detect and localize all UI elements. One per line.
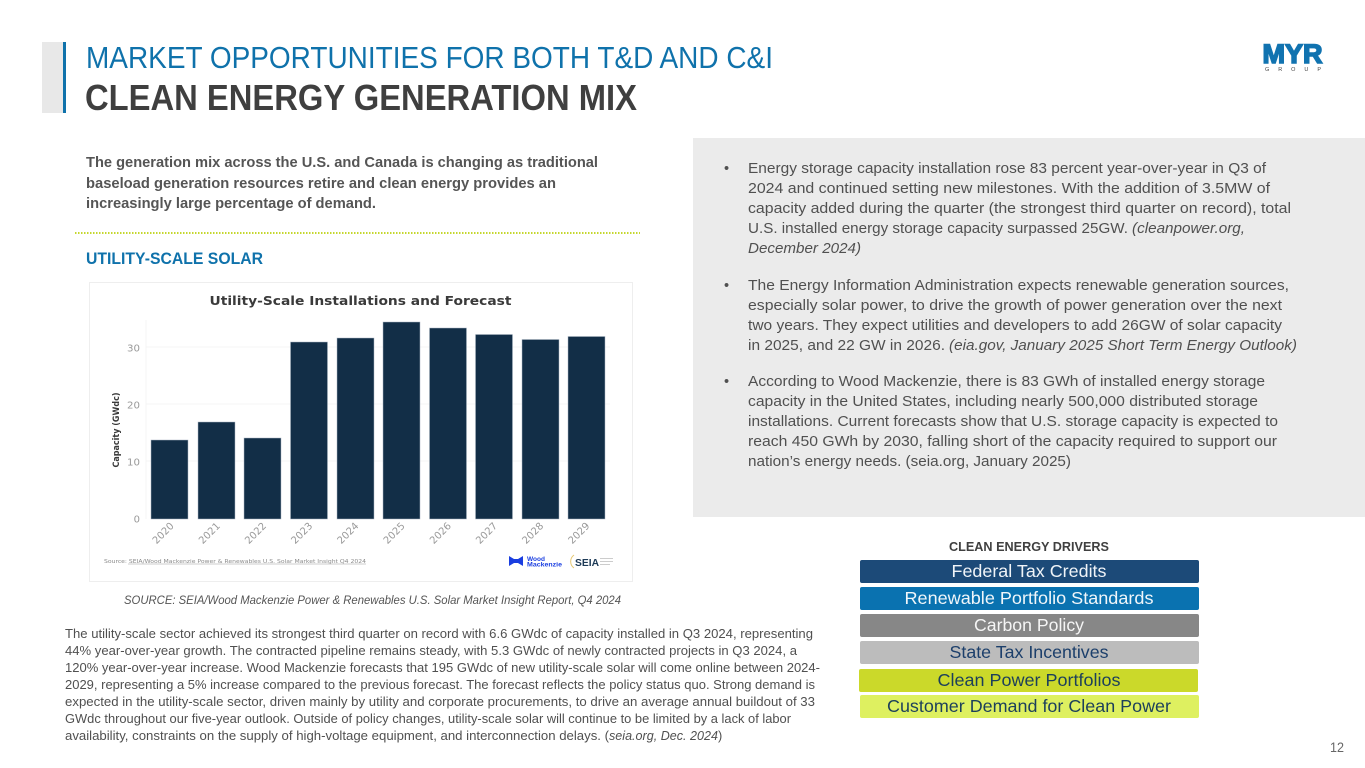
text block: utility-scale paragraph: The utility-scale sector achieved its strongest third quarter on record with 6.6 GWdc of capacity installed in Q3 2024, representing [65,626,813,641]
driver: carbon policy: Carbon Policy [974,615,1084,635]
bullet: Energy Information Administration: in 2025, and 22 GW in 2026. [748,338,945,354]
driver: state tax incentives [860,641,1199,664]
chart source caption: SOURCE: SEIA/Wood Mackenzie Power & Renewables U.S. Solar Market Insight Report, Q4 2024 [124,595,621,607]
intro text [86,155,598,212]
bullet: energy storage capacity: December 2024) [748,241,861,257]
intro text: The generation mix across the U.S. and Canada is changing as traditional [86,155,598,171]
bullet: Wood Mackenzie storage forecast: capacity in the United States, including nearly 500,000 distributed storage [748,394,1258,410]
y axis labels: 20 [127,400,140,412]
driver: clean power portfolios: Clean Power Portfolios [938,670,1121,690]
y axis labels: 10 [127,458,140,468]
chart source: Source: SEIA/Wood Mackenzie Power & Renewables U.S. Solar Market Insight Q4 2024 [104,559,366,565]
x axis labels: 2028 [520,521,546,547]
x axis labels: 2026 [428,521,454,547]
chart title: Utility-Scale Installations and Forecast [210,294,512,308]
bars [151,322,605,519]
icon: Wood Mackenzie logo: Wood [527,556,545,563]
text block: utility-scale paragraph: seia.org, Dec. 2024 [609,728,718,743]
bullet: Energy Information Administration: (eia.gov, January 2025 Short Term Energy Outlook) [949,338,1297,354]
icon: Wood Mackenzie logo: Mackenzie [527,562,562,568]
page number: 12 [1330,740,1344,755]
driver: federal tax credits [860,560,1199,583]
bullet: energy storage capacity: (cleanpower.org, [1132,221,1245,237]
bullet: Wood Mackenzie storage forecast [724,374,1278,470]
x axis labels: 2025 [382,521,408,547]
text block: utility-scale paragraph: 2029, representing a 5% increase compared to the previous forecast. The forecast reflects the policy status quo. Strong demand is [65,677,815,692]
icon: MYR Group logo: MYR [1262,39,1322,69]
y axis labels [127,344,140,526]
bullet: Energy Information Administration: two years. They expect utilities and developers to add 26GW of solar capacity [748,318,1283,334]
bullet: Wood Mackenzie storage forecast: installations. Current forecasts show that U.S. storage capacity is expected to [748,414,1278,430]
text block: utility-scale paragraph: expected in the utility-scale sector, driven mainly by utility and corporate procurements, to drive an average annual buildout of 33 [65,694,815,709]
bullet: energy storage capacity: 2024 and continued setting new milestones. With the addition of 3.5MW of [748,181,1271,197]
text block: utility-scale paragraph: 120% year-over-year increase. Wood Mackenzie forecasts that 195 GWdc of new utility-scale solar will come online between 2024- [65,660,820,675]
driver: federal tax credits: Federal Tax Credits [952,561,1107,581]
title [85,40,773,118]
x axis labels: 2024 [336,521,361,547]
bar chart: utility-scale installations and forecast [90,282,632,582]
y axis labels: 0 [134,514,140,526]
icon: SEIA logo [571,555,613,569]
driver: renewable portfolio standards [860,587,1199,610]
x axis labels: 2021 [197,521,223,547]
driver: renewable portfolio standards: Renewable Portfolio Standards [904,588,1154,608]
driver list [859,560,1199,718]
x axis labels: 2023 [289,521,315,547]
intro text: increasingly large percentage of demand. [86,196,376,212]
section heading: utility-scale solar: UTILITY-SCALE SOLAR [86,249,263,268]
bullet: energy storage capacity: capacity added during the quarter (the strongest third quarter on record), total [748,201,1291,217]
bullet: Wood Mackenzie storage forecast: reach 450 GWh by 2030, falling short of the capacity required to support our [748,434,1277,450]
heading: clean energy drivers: CLEAN ENERGY DRIVERS [949,539,1109,554]
text block: utility-scale paragraph: 44% year-over-year growth. The contracted pipeline remains steady, with 5.3 GWdc of newly contracted projects in Q3 2024, a [65,643,798,658]
panel: energy storage and generation notes [693,138,1365,517]
bullet: Energy Information Administration [724,278,1297,354]
bullet: Wood Mackenzie storage forecast: • [724,374,729,390]
icon: Wood Mackenzie logo [509,556,562,568]
text block: utility-scale paragraph: availability, constraints on the supply of high-voltage equipment, and interconnection delays. ( [65,728,610,743]
icon: MYR Group logo: G R O U P [1265,67,1321,73]
driver: state tax incentives: State Tax Incentives [950,642,1109,662]
driver: customer demand for clean power: Customer Demand for Clean Power [887,696,1171,716]
bullet: energy storage capacity: Energy storage capacity installation rose 83 percent year-over-year in Q3 of [748,161,1267,177]
bullet: Wood Mackenzie storage forecast: nation’s energy needs. (seia.org, January 2025) [748,454,1071,470]
text block: utility-scale paragraph [65,626,820,743]
title: MARKET OPPORTUNITIES FOR BOTH T&D AND C&I [86,40,773,75]
bullet: Energy Information Administration: The Energy Information Administration expects renewable generation sources, [748,278,1289,294]
header accent bar [42,42,66,113]
bullet: Energy Information Administration: • [724,278,729,294]
x axis labels: 2022 [243,521,269,547]
title: CLEAN ENERGY GENERATION MIX [85,77,637,118]
x axis labels: 2020 [151,521,177,547]
icon: SEIA logo: SEIA [575,558,599,569]
bullet: energy storage capacity: U.S. installed energy storage capacity surpassed 25GW. [748,221,1128,237]
bullet: Energy Information Administration: especially solar power, to drive the growth of power generation over the next [748,298,1282,314]
bullet: energy storage capacity [724,161,1291,257]
y axis title: Capacity (GWdc) [112,392,122,468]
driver: clean power portfolios [859,669,1198,692]
bullet: Wood Mackenzie storage forecast: According to Wood Mackenzie, there is 83 GWh of installed energy storage [748,374,1265,390]
x axis labels: 2027 [474,521,500,547]
text block: utility-scale paragraph: ) [718,728,722,743]
text block: utility-scale paragraph: GWdc throughout our five-year outlook. Outside of policy changes, utility-scale solar will continue to be limited by a lack of labor [65,711,792,726]
y axis labels: 30 [127,344,140,354]
driver: carbon policy [860,614,1199,637]
bullet: energy storage capacity: • [724,161,729,177]
x axis labels [151,521,592,547]
intro text: baseload generation resources retire and clean energy provides an [86,176,556,192]
x axis labels: 2029 [567,521,592,547]
